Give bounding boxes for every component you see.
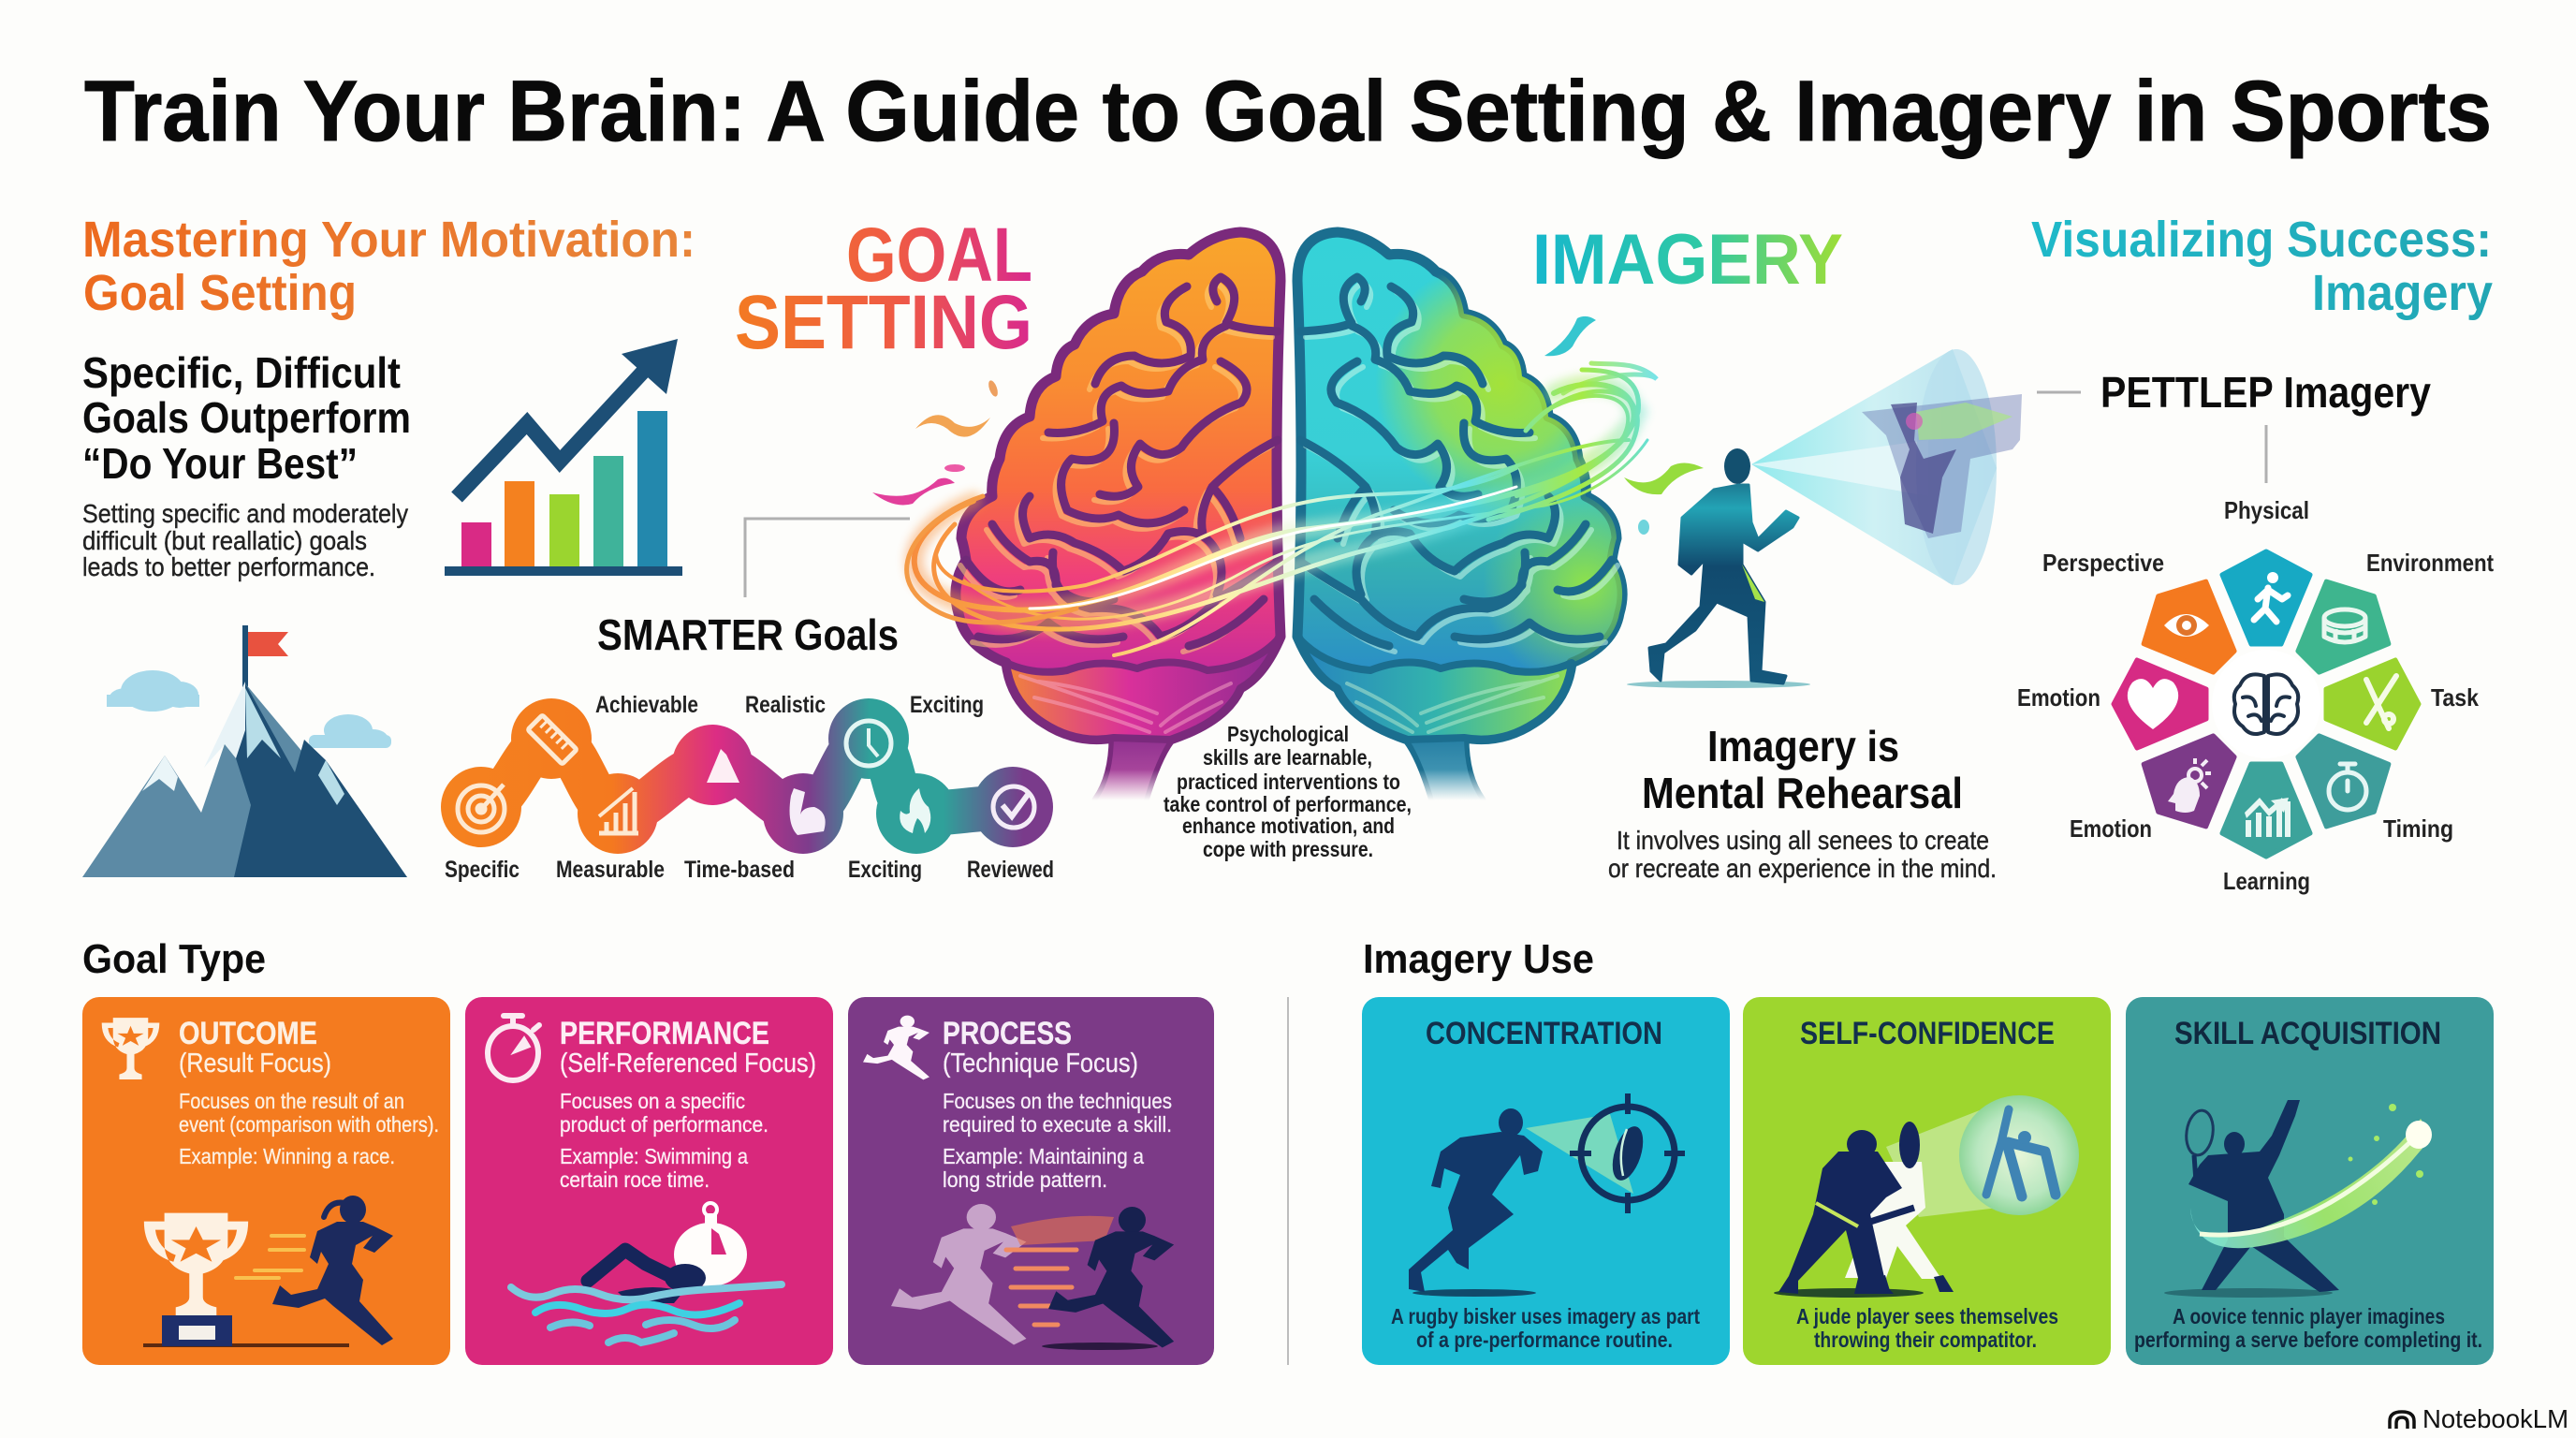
icon: target	[458, 785, 505, 832]
card caption	[1391, 1304, 1700, 1352]
icon: check badge	[993, 786, 1034, 828]
centre hub	[2212, 650, 2320, 758]
icon: hub brain	[2234, 674, 2298, 734]
illustration: rugby player and target	[1409, 1093, 1685, 1297]
card heading: SKILL ACQUISITION	[2174, 1016, 2441, 1051]
footer: NotebookLM mark: NotebookLM	[2422, 1404, 2569, 1433]
decorative energy wisps	[872, 316, 1704, 535]
segment: emotion pink	[2114, 660, 2206, 748]
card text	[560, 1016, 816, 1192]
labels: Exciting	[910, 692, 984, 718]
card text: Example: Swimming a	[560, 1144, 748, 1168]
text: imagery explanation: or recreate an experience in the mind.	[1608, 854, 1997, 883]
card: outcome	[82, 997, 450, 1365]
heading: goal setting word art	[735, 213, 1032, 365]
illustration: two runners	[891, 1204, 1174, 1350]
heading: imagery is mental rehearsal	[1642, 722, 1963, 817]
card text: event (comparison with others).	[179, 1112, 439, 1137]
heading: mastering your motivation: Goal Setting	[83, 265, 357, 321]
icon: small chart	[599, 788, 638, 833]
icon: stopwatch	[2329, 764, 2366, 810]
illustration: swimmer and stopwatch	[511, 1203, 782, 1343]
card text: product of performance.	[560, 1112, 768, 1137]
icon: mountain peak	[688, 749, 739, 783]
heading: visualizing success: Imagery	[2312, 265, 2493, 321]
text: goal setting explanation: Setting specific and moderately	[82, 499, 408, 528]
icon: clock	[846, 721, 891, 766]
text: psychological skills: enhance motivation, and	[1182, 814, 1395, 838]
card text: certain roce time.	[560, 1167, 710, 1192]
card text	[943, 1016, 1172, 1192]
wheel labels: Emotion	[2070, 814, 2152, 843]
card: performance	[465, 997, 833, 1365]
heading: SMARTER goals: SMARTER Goals	[597, 610, 899, 659]
card text: (Self-Referenced Focus)	[560, 1049, 816, 1078]
energy swirl across brain	[907, 363, 1657, 655]
text: psychological skills: skills are learnable,	[1203, 745, 1372, 770]
card: skill acquisition	[2126, 997, 2494, 1365]
text: goal setting explanation	[82, 499, 408, 581]
card text: OUTCOME	[179, 1016, 317, 1051]
text: imagery explanation	[1608, 826, 1997, 883]
icon: person walking	[2254, 572, 2288, 622]
icon: mountain with flag	[82, 625, 407, 877]
labels	[445, 692, 1054, 883]
wheel labels: Environment	[2366, 549, 2494, 577]
card text	[179, 1016, 439, 1168]
card caption	[1796, 1304, 2058, 1352]
heading: mastering your motivation: Mastering Your Motivation:	[82, 212, 695, 268]
connector lines to PETTLEP	[2037, 392, 2266, 483]
labels: Time-based	[684, 857, 795, 883]
card text: Focuses on the techniques	[943, 1089, 1172, 1113]
heading: visualizing success	[2031, 212, 2493, 321]
text: psychological skills: practiced interventions to	[1177, 770, 1400, 794]
card caption: throwing their compatitor.	[1814, 1328, 2037, 1352]
heading: mastering your motivation	[82, 212, 695, 321]
diagram: PETTLEP wheel	[2017, 496, 2494, 895]
card: self-confidence	[1743, 997, 2111, 1365]
card text: required to execute a skill.	[943, 1112, 1172, 1137]
illustration: brain right hemisphere	[1297, 232, 1622, 811]
heading: imagery word art: IMAGERY	[1532, 220, 1843, 300]
wheel labels	[2017, 496, 2494, 895]
text: imagery explanation: It involves using all senees to create	[1617, 826, 1989, 855]
icon: rising bar chart with arrow	[445, 339, 682, 576]
heading: PETTLEP imagery: PETTLEP Imagery	[2100, 368, 2431, 417]
heading: visualizing success: Visualizing Success:	[2031, 212, 2492, 268]
wheel labels: Timing	[2383, 814, 2453, 843]
text: goal setting explanation: leads to better performance.	[82, 552, 375, 581]
icon: heart	[2128, 679, 2178, 729]
icon: flame	[900, 788, 930, 833]
heading: specific difficult goals: “Do Your Best”	[82, 439, 358, 488]
card caption: of a pre-performance routine.	[1416, 1328, 1673, 1352]
segment: timing	[2277, 715, 2405, 843]
wheel labels: Physical	[2224, 496, 2309, 524]
icon: ruler	[528, 715, 577, 764]
heading: goal type: Goal Type	[82, 936, 266, 982]
chain body	[441, 698, 1053, 854]
card caption: A jude player sees themselves	[1796, 1304, 2058, 1328]
wheel labels: Emotion	[2017, 683, 2100, 712]
card caption: A oovice tennic player imagines	[2173, 1304, 2445, 1328]
icon: stadium	[2324, 609, 2365, 642]
heading: specific difficult goals	[82, 348, 411, 488]
diagram: SMARTER chain	[441, 692, 1054, 883]
text: psychological skills	[1164, 722, 1412, 861]
heading: goal setting word art: GOAL	[846, 213, 1032, 298]
icon: small trophy	[102, 1018, 159, 1079]
icon: head with burst	[2168, 758, 2211, 813]
illustration: running athlete	[1627, 448, 1810, 688]
icon: crossed stick and ball	[2366, 676, 2396, 728]
card text: long stride pattern.	[943, 1167, 1107, 1192]
heading: specific difficult goals: Goals Outperform	[82, 393, 411, 442]
segment: environment	[2277, 565, 2405, 693]
panel divider	[1287, 997, 1289, 1365]
labels: Specific	[445, 857, 520, 883]
wheel labels: Perspective	[2042, 549, 2164, 577]
illustration: imagined projection cone	[1751, 349, 2022, 585]
wheel labels: Task	[2431, 683, 2479, 712]
icon: rising chart	[2245, 798, 2291, 837]
card text: Example: Maintaining a	[943, 1144, 1144, 1168]
heading: imagery is mental rehearsal: Imagery is	[1707, 722, 1899, 770]
icon: runner	[863, 1016, 929, 1079]
connector line to SMARTER goals	[745, 519, 910, 597]
heading: specific difficult goals: Specific, Difficult	[82, 348, 401, 397]
heading: imagery use: Imagery Use	[1363, 936, 1594, 982]
card text: PROCESS	[943, 1016, 1072, 1051]
illustration: brain left hemisphere	[956, 232, 1281, 811]
heading: goal setting word art: SETTING	[735, 280, 1032, 365]
segment: task	[2326, 660, 2419, 748]
card caption: A rugby bisker uses imagery as part	[1391, 1304, 1700, 1328]
card text: Focuses on a specific	[560, 1089, 745, 1113]
text: psychological skills: take control of performance,	[1164, 792, 1412, 816]
card: concentration	[1362, 997, 1730, 1365]
card text: (Result Focus)	[179, 1049, 331, 1078]
card heading: SELF-CONFIDENCE	[1800, 1016, 2055, 1051]
card caption	[2134, 1304, 2482, 1352]
labels: Realistic	[745, 692, 826, 718]
segment: perspective	[2128, 565, 2255, 693]
segment: learning	[2222, 764, 2310, 857]
card: process	[848, 997, 1214, 1365]
text: goal setting explanation: difficult (but reallatic) goals	[82, 526, 367, 555]
wheel labels: Learning	[2223, 867, 2310, 895]
title: Train Your Brain: A Guide to Goal Setting & Imagery in Sports	[84, 64, 2492, 159]
card text: Example: Winning a race.	[179, 1144, 395, 1168]
card text: (Technique Focus)	[943, 1049, 1138, 1078]
card caption: performing a serve before completing it.	[2134, 1328, 2482, 1352]
text: psychological skills: cope with pressure.	[1203, 837, 1373, 861]
illustration: judo players and vision bubble	[1774, 1095, 2079, 1298]
illustration: trophy and runner	[143, 1196, 393, 1347]
icon: flexed arm	[790, 788, 826, 835]
labels: Achievable	[595, 692, 698, 718]
icon: stopwatch outline	[488, 1016, 539, 1080]
text: psychological skills: Psychological	[1227, 722, 1349, 746]
segment: emotion purple	[2128, 715, 2255, 843]
labels: Measurable	[556, 857, 665, 883]
heading: imagery is mental rehearsal: Mental Rehearsal	[1642, 769, 1963, 817]
icon: eye	[2164, 614, 2209, 637]
card text: Focuses on the result of an	[179, 1089, 404, 1113]
illustration: tennis player and ball trail	[2164, 1100, 2432, 1298]
segment: physical	[2222, 551, 2310, 644]
card heading: CONCENTRATION	[1426, 1016, 1662, 1051]
card text: PERFORMANCE	[560, 1016, 769, 1051]
labels: Exciting	[848, 857, 922, 883]
labels: Reviewed	[967, 857, 1054, 883]
